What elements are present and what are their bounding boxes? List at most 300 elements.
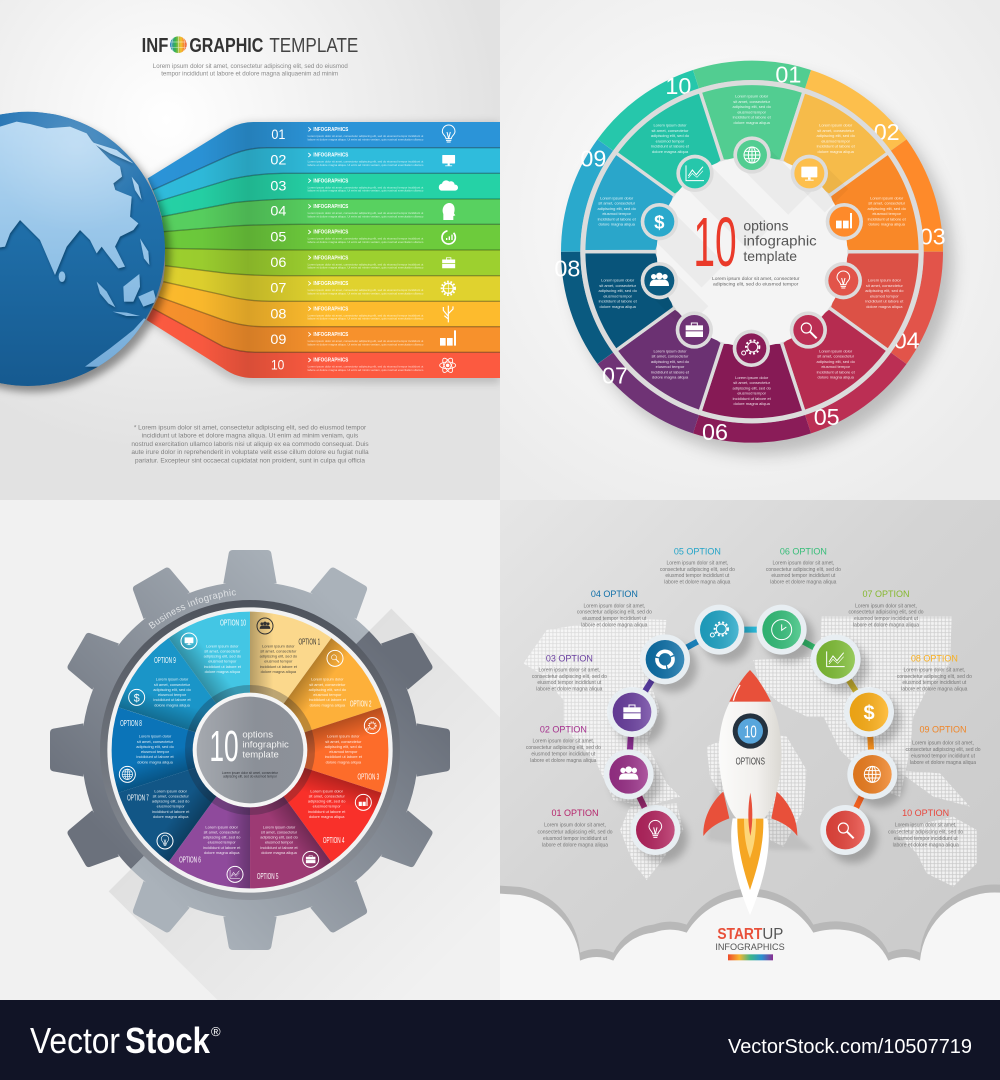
icon: gauge [442,231,455,244]
circle shadow [571,72,953,454]
wedge text 09: Lorem ipsum dolor [600,195,634,200]
option 09 text: consectetur adipiscing elit, sed do [905,747,981,753]
option 04 text: labore et dolore magna aliqua [581,623,648,629]
wedge text 07: adipiscing elit, sed do [651,359,690,364]
option 03 text: consectetur adipiscing elit, sed do [532,674,607,680]
fins [703,792,797,836]
flame [731,818,769,915]
option 03 text: 03 OPTION [546,653,593,663]
icon: 02 monitor [791,155,828,192]
wedge text 08: adipiscing elit, sed do [599,288,638,293]
option 05 text: labore et dolore magna aliqua [664,580,731,586]
startup title: START [717,926,763,943]
wedge text option 2: Lorem ipsum dolor [311,677,344,682]
icon: option 2 search [327,650,343,666]
wedge text option 10: adipiscing elit, sed do [204,654,242,659]
ribbon row 07 [270,280,455,296]
option 03 text [532,653,607,693]
option 02 text: consectetur adipiscing elit, sed do [526,745,601,751]
wedge text 10: adipiscing elit, sed do [651,133,690,138]
wedge text option 1: dolore magna aliqua [261,669,297,674]
wedge text 10: Lorem ipsum dolor [653,123,687,128]
wedge text 09: adipiscing elit, sed do [598,206,637,211]
wedge text option 9: Lorem ipsum dolor [156,677,189,682]
icon: option 7 bulb [157,833,173,849]
text block: footnote: nostrud exercitation ullamco laboris nisi ut aliquip ex ea commodo consequat. Duis [131,441,369,448]
option 08 text: labore et dolore magna aliqua [901,687,968,693]
icon: 03 factory [826,203,863,240]
wedge text 08: eiusmod tempor [603,293,633,298]
wedge text 03: dolore magna aliqua [869,221,906,226]
icon: 09 dollar [641,203,678,240]
rocket [703,670,813,915]
wedge text option 3: Lorem ipsum dolor [327,734,360,739]
ring numbers [554,61,946,445]
text block: footnote: pariatur. Excepteur sint occaecat cupidatat non proident, sunt in culpa qui officia [135,457,365,464]
option labels: OPTION 3 [358,772,379,782]
wedge text option 10: sit amet, consectetur [204,648,241,653]
ring numbers: 03 [920,224,946,250]
ribbon row 04: labore et dolore magna aliqua. Ut enim ad minim veniam, quis nostrud exercitation ullamco [308,214,424,218]
ring numbers: 06 [702,419,728,445]
option 03 text: Lorem ipsum dolor sit amet, [538,667,600,673]
ribbon row 05 [270,228,455,244]
icon: option 9 dollar [129,689,145,705]
world map dots [523,617,977,887]
ribbon row 04: 04 [270,203,287,219]
wedge text 09: dolore magna aliqua [599,221,636,226]
wedge text 01: Lorem ipsum dolor [735,94,769,99]
icon long shadows [659,155,837,318]
gear rim [100,600,400,900]
option 06 text: Lorem ipsum dolor sit amet, [772,560,834,566]
wedge text option 1: eiusmod tempor [264,659,293,664]
wedge text 05: Lorem ipsum dolor [819,348,853,353]
ribbon row 01: 01 [271,126,286,142]
icon: 07 briefcase [676,311,713,349]
title: TEMPLATE [269,35,358,57]
wedge text option 4: sit amet, consectetur [309,793,345,798]
node 05 gear [694,605,752,663]
wedge text 10: eiusmod tempor [656,138,685,143]
icon: option 9 dollar: $ [134,692,140,704]
wedge text 03: adipiscing elit, sed do [868,206,907,211]
wedge text 02: incididunt ut labore et [817,144,856,149]
icon: bulb [442,125,455,142]
option labels: OPTION 7 [127,793,149,803]
ribbon row 10: Lorem ipsum dolor sit amet, consectetur adipiscing elit, sed do eiusmod tempor incididunt ut [308,365,424,369]
wedge text 07: Lorem ipsum dolor [653,348,687,353]
ring numbers: 09 [580,146,606,172]
wedge text option 6: adipiscing elit, sed do [203,835,241,840]
title: GRAPHIC [189,35,263,57]
wedge text option 10: Lorem ipsum dolor [206,643,239,648]
icon: 01 globe [733,136,771,174]
nose cone [729,670,771,702]
ribbon row 06: Lorem ipsum dolor sit amet, consectetur adipiscing elit, sed do eiusmod tempor incididunt ut [308,262,424,266]
wedge text option 1: incididunt ut labore et [260,664,298,669]
wedge text option 10: incididunt ut labore et [204,664,242,669]
wedge text option 8: eiusmod tempor [141,749,170,754]
option 08 text: 08 OPTION [911,653,958,663]
node 08 dollar [844,687,901,745]
ribbon row 02 [270,152,455,168]
globe [0,112,165,386]
gear body [50,550,450,950]
option 05 text: Lorem ipsum dolor sit amet, [666,560,728,566]
node 09 globe [847,749,905,807]
wedge text option 7: sit amet, consectetur [153,793,189,798]
panel: gear infographic [0,500,500,1000]
option 10 text: Lorem ipsum dolor sit amet, [895,823,957,829]
ribbon row 04 [270,203,455,220]
wedge text option 7: eiusmod tempor [157,804,185,809]
wedge text option 3: eiusmod tempor [329,749,358,754]
option 07 text: 07 OPTION [862,589,910,599]
wedge text option 8: dolore magna aliqua [137,759,174,764]
option 03 text: eiusmod tempor incididunt ut [537,680,602,686]
ribbon row 10 [271,356,456,374]
footer bar [0,1000,1000,1080]
ribbon row 02: INFOGRAPHICS [313,153,349,159]
option 07 text: Lorem ipsum dolor sit amet, [855,603,917,609]
wedge text option 5: Lorem ipsum dolor [263,824,296,829]
ring numbers: 04 [894,327,920,353]
wedge text 07: dolore magna aliqua [652,374,689,380]
ribbon row 03: INFOGRAPHICS [313,178,349,184]
porthole: 10 [744,722,757,742]
icon: 09 dollar: $ [654,211,665,232]
option 08 text: eiusmod tempor incididunt ut [902,680,967,686]
ribbon row 02: Lorem ipsum dolor sit amet, consectetur adipiscing elit, sed do eiusmod tempor incididunt ut [308,160,424,164]
wedge text 05: sit amet, consectetur [817,354,855,359]
wedge text option 1: sit amet, consectetur [260,648,297,653]
wedge text option 7: Lorem ipsum dolor [154,788,188,793]
option 08 text [897,653,972,693]
wedge text 10: incididunt ut labore et [651,144,690,149]
option 08 text: Lorem ipsum dolor sit amet, [903,667,965,673]
option 06 text [766,546,841,586]
footer logo [30,1020,221,1061]
wedge text option 4: dolore magna aliqua [309,814,345,819]
wedge text 02: adipiscing elit, sed do [817,133,856,138]
wedge text option 4: eiusmod tempor [313,804,341,809]
ribbons [147,122,500,378]
text block: footnote: aute irure dolor in reprehenderit in voluptate velit esse cillum dolore eu fugiat nulla [131,449,369,456]
option 01 text: labore et dolore magna aliqua [542,843,608,849]
panel: circle infographic [500,0,1000,500]
ribbon row 10: INFOGRAPHICS [313,358,349,364]
option 01 text: 01 OPTION [551,808,599,818]
ribbon row 03: 03 [270,177,287,193]
wedge text 03: sit amet, consectetur [868,201,906,206]
ring numbers: 10 [665,73,691,99]
wedge text 10: sit amet, consectetur [652,128,689,133]
wedge text option 4: incididunt ut labore et [308,809,346,814]
ribbon row 07: INFOGRAPHICS [313,281,349,287]
ribbon shadow [147,122,500,383]
ribbon row 05: 05 [270,228,287,244]
center heading: options [743,217,788,233]
option 02 text: Lorem ipsum dolor sit amet, [532,739,594,745]
wedge text 04: sit amet, consectetur [866,283,903,288]
wedge text 02: eiusmod tempor [821,138,851,143]
option 10 text: eiusmod tempor incididunt ut [894,836,958,842]
wedge text option 1: Lorem ipsum dolor [262,643,295,648]
wedge text option 10: eiusmod tempor [208,659,237,664]
option 06 text: eiusmod tempor incididunt ut [771,573,836,579]
option 06 text: consectetur adipiscing elit, sed do [766,567,841,573]
wedge text 05: adipiscing elit, sed do [817,359,856,364]
wedge text 08: sit amet, consectetur [599,283,637,288]
center fin [748,793,752,836]
option 01 text: consectetur adipiscing elit, sed do [537,829,613,835]
wedge text option 9: dolore magna aliqua [154,702,191,707]
wedge text option 3: adipiscing elit, sed do [325,744,363,749]
wedge text 09: eiusmod tempor [602,211,632,216]
footer logo: Stock [125,1020,211,1061]
startup title [715,926,785,960]
ribbon row 08 [270,305,453,322]
startup title: INFOGRAPHICS [715,942,785,952]
option labels [120,617,379,881]
porthole [733,713,768,749]
wedge text 05: dolore magna aliqua [818,374,855,380]
wedge text option 6: dolore magna aliqua [204,850,240,855]
wedge text 01: eiusmod tempor [737,109,767,114]
option 01 text: Lorem ipsum dolor sit amet, [544,823,606,829]
wedge text 05: eiusmod tempor [821,364,851,369]
ribbon row 03: labore et dolore magna aliqua. Ut enim ad minim veniam, quis nostrud exercitation ullamco [308,189,424,193]
option 09 text [905,725,981,766]
wedge text 09: incididunt ut labore et [598,216,637,221]
option 04 text: Lorem ipsum dolor sit amet, [583,603,645,609]
wedge text 01: incididunt ut labore et [733,115,772,120]
option 05 text: 05 OPTION [674,546,721,556]
wedge text option 4: Lorem ipsum dolor [310,788,344,793]
wedge text 06: eiusmod tempor [737,391,767,396]
ring numbers: 07 [602,362,628,388]
wedge text 07: sit amet, consectetur [652,354,689,359]
footer logo: Vector [30,1020,120,1061]
wedge text 04: incididunt ut labore et [865,299,904,304]
ribbon row 09: Lorem ipsum dolor sit amet, consectetur adipiscing elit, sed do eiusmod tempor incididunt ut [308,339,424,343]
ribbon row 08: INFOGRAPHICS [313,306,349,312]
option 04 text: eiusmod tempor incididunt ut [582,616,647,622]
wedge text 08: incididunt ut labore et [599,299,638,304]
ring numbers: 01 [775,61,801,87]
icon: option 4 factory [355,794,371,810]
wedge text 02: dolore magna aliqua [818,149,855,154]
icon: briefcase [442,258,455,268]
node 06 clock [757,605,814,663]
wedge text option 3: dolore magna aliqua [326,759,362,764]
ribbon row 01: INFOGRAPHICS [313,127,349,133]
text block: subtitle: Lorem ipsum dolor sit amet, consectetur adipiscing elit, sed do eiusmod [153,63,348,70]
wedge text 05: incididunt ut labore et [817,369,856,374]
ribbon row 08: labore et dolore magna aliqua. Ut enim ad minim veniam, quis nostrud exercitation ullamco [308,317,424,321]
option labels: OPTION 4 [323,835,345,845]
wedge text 09: sit amet, consectetur [598,201,636,206]
text block: footnote: incididunt ut labore et dolore magna aliqua. Ut enim ad minim veniam, quis [142,433,359,440]
wedge text option 5: eiusmod tempor [265,840,294,845]
wedge text option 6: eiusmod tempor [208,840,236,845]
wedge text option 2: sit amet, consectetur [309,682,346,687]
wedge text 07: incididunt ut labore et [651,369,690,374]
text block: subtitle: tempor incididunt ut labore et dolore magna aliquaenim ad minim [161,70,338,77]
icon: factory [440,330,456,346]
curved label: Business infographic [148,589,236,629]
option 07 text: labore et dolore magna aliqua [853,623,919,629]
ribbon row 07: 07 [270,280,287,296]
option 02 text: eiusmod tempor incididunt ut [531,752,596,758]
center hub: adipiscing elit, sed do eiusmod tempor [223,774,277,778]
wedge text option 8: adipiscing elit, sed do [136,744,175,749]
option 07 text: eiusmod tempor incididunt ut [854,616,919,622]
option 07 text [848,589,924,629]
option 05 text: eiusmod tempor incididunt ut [665,573,730,579]
center hub: Lorem ipsum dolor sit amet, consectetur [222,771,278,775]
wedge text option 4: adipiscing elit, sed do [308,799,346,804]
icon: title globe [170,36,187,53]
node 02 people [604,749,661,807]
center hub: template [242,750,279,761]
option 09 text: Lorem ipsum dolor sit amet, [912,741,974,747]
option 09 text: eiusmod tempor incididunt ut [911,754,976,760]
wedge text 02: Lorem ipsum dolor [819,123,853,128]
footer image id: VectorStock.com/10507719 [728,1035,972,1058]
gear long shadow [109,609,607,1080]
footer logo: ® [211,1024,221,1039]
wedge text option 6: incididunt ut labore et [203,845,241,850]
ribbon row 05: Lorem ipsum dolor sit amet, consectetur adipiscing elit, sed do eiusmod tempor incididunt ut [308,237,424,241]
ribbon row 01 [271,125,455,142]
wedge text option 8: sit amet, consectetur [137,739,174,744]
option 03 text: labore et dolore magna aliqua [536,687,603,693]
wedge text 03: Lorem ipsum dolor [870,195,904,200]
wedge text option 2: dolore magna aliqua [310,702,346,707]
outer ring segments [552,61,952,443]
option 10 text [888,808,963,849]
wedge text 06: incididunt ut labore et [733,396,772,401]
center hub [185,685,315,815]
ribbon row 03: Lorem ipsum dolor sit amet, consectetur adipiscing elit, sed do eiusmod tempor incididunt ut [308,185,424,189]
ring numbers: 02 [874,119,900,145]
icon: 06 gear [733,330,770,367]
option 10 text: labore et dolore magna aliqua [893,843,959,849]
center hub: options [242,730,273,741]
wedge text 04: adipiscing elit, sed do [865,288,904,293]
center hub: 10 [209,722,239,771]
clouds [497,892,1000,1013]
ribbon row 10: labore et dolore magna aliqua. Ut enim ad minim veniam, quis nostrud exercitation ullamco [308,368,424,372]
panel: rocket startup infographic [500,500,1000,1000]
text block: footnote: * Lorem ipsum dolor sit amet, consectetur adipiscing elit, sed do eiusmod tempor [134,424,367,431]
node 03 briefcase [607,687,664,745]
ring numbers: 08 [554,256,580,282]
ribbon row 05: labore et dolore magna aliqua. Ut enim ad minim veniam, quis nostrud exercitation ullamco [308,240,424,244]
center hub: infographic [242,740,289,751]
wedge text option 5: sit amet, consectetur [261,829,298,834]
icon: option 6 chart [227,866,243,882]
center text: Lorem ipsum dolor sit amet, consectetur [712,276,800,282]
icon: head [443,203,455,220]
ribbon row 04: INFOGRAPHICS [313,204,349,210]
option 08 text: consectetur adipiscing elit, sed do [897,674,972,680]
wedge text 06: dolore magna aliqua [734,401,771,406]
icon: option 10 monitor [181,633,197,649]
icon: tree [443,306,453,322]
pie wedges [93,590,407,910]
ribbon row 06: 06 [270,254,287,270]
wedge text option 10: dolore magna aliqua [205,669,241,674]
option 04 text: consectetur adipiscing elit, sed do [577,610,652,616]
node 08 dollar: $ [863,702,875,724]
wedge text option 8: incididunt ut labore et [136,754,175,759]
wedge text 02: sit amet, consectetur [817,128,855,133]
ribbon row 09 [270,330,456,347]
wedge text 04: dolore magna aliqua [866,304,903,309]
option labels: OPTION 5 [257,871,279,881]
ribbon row 09: INFOGRAPHICS [313,332,349,338]
icon: option 5 briefcase [303,851,319,867]
option 10 text: consectetur adipiscing elit, sed do [888,829,963,835]
wedge text 06: sit amet, consectetur [733,380,771,385]
inner ring and wedges [576,80,928,423]
ribbon row 02: labore et dolore magna aliqua. Ut enim ad minim veniam, quis nostrud exercitation ullamco [308,163,424,167]
icon: monitor [442,155,455,166]
wedge text 07: eiusmod tempor [656,364,685,369]
ribbon row 02: 02 [270,152,287,168]
icon: atom [440,357,456,374]
wedge text option 5: incididunt ut labore et [260,845,299,850]
icon: 10 chart [676,155,714,192]
connectors [629,630,872,830]
ribbon row 06: labore et dolore magna aliqua. Ut enim ad minim veniam, quis nostrud exercitation ullamco [308,266,424,270]
option 02 text [526,725,601,764]
center heading: infographic [743,233,817,249]
title [142,35,358,57]
rocket body [719,702,782,819]
wedge text option 2: adipiscing elit, sed do [309,687,347,692]
option 10 text: 10 OPTION [902,808,949,818]
icon: 05 search [790,311,827,349]
wedge text option 9: sit amet, consectetur [154,682,191,687]
wedge text 04: eiusmod tempor [870,293,899,298]
option 01 text [537,808,613,849]
wedge text option 9: eiusmod tempor [158,692,187,697]
ribbon row 01: Lorem ipsum dolor sit amet, consectetur adipiscing elit, sed do eiusmod tempor incididunt ut [308,134,424,138]
cloud shadow [497,884,1000,1005]
icon: sun gear [442,282,455,295]
ribbon row 09: labore et dolore magna aliqua. Ut enim ad minim veniam, quis nostrud exercitation ullamco [308,342,424,346]
wedge text option 5: dolore magna aliqua [261,850,298,855]
wedge text option 7: dolore magna aliqua [153,814,189,819]
icon: option 8 globe [119,766,135,782]
wedge text 06: Lorem ipsum dolor [735,375,769,380]
wedge text option 1: adipiscing elit, sed do [260,654,298,659]
node 04 donut [640,634,697,692]
ribbon row 07: Lorem ipsum dolor sit amet, consectetur adipiscing elit, sed do eiusmod tempor incididunt ut [308,288,424,292]
rocket label: OPTIONS [736,757,765,768]
wedge text 01: dolore magna aliqua [734,120,771,125]
ribbon row 09: 09 [270,331,287,347]
wedge text 01: adipiscing elit, sed do [733,104,772,109]
ribbon row 10: 10 [271,356,285,372]
option labels: OPTION 10 [220,617,246,627]
ribbon row 04: Lorem ipsum dolor sit amet, consectetur adipiscing elit, sed do eiusmod tempor incididunt ut [308,211,424,215]
icon: option 1 people [257,618,273,634]
